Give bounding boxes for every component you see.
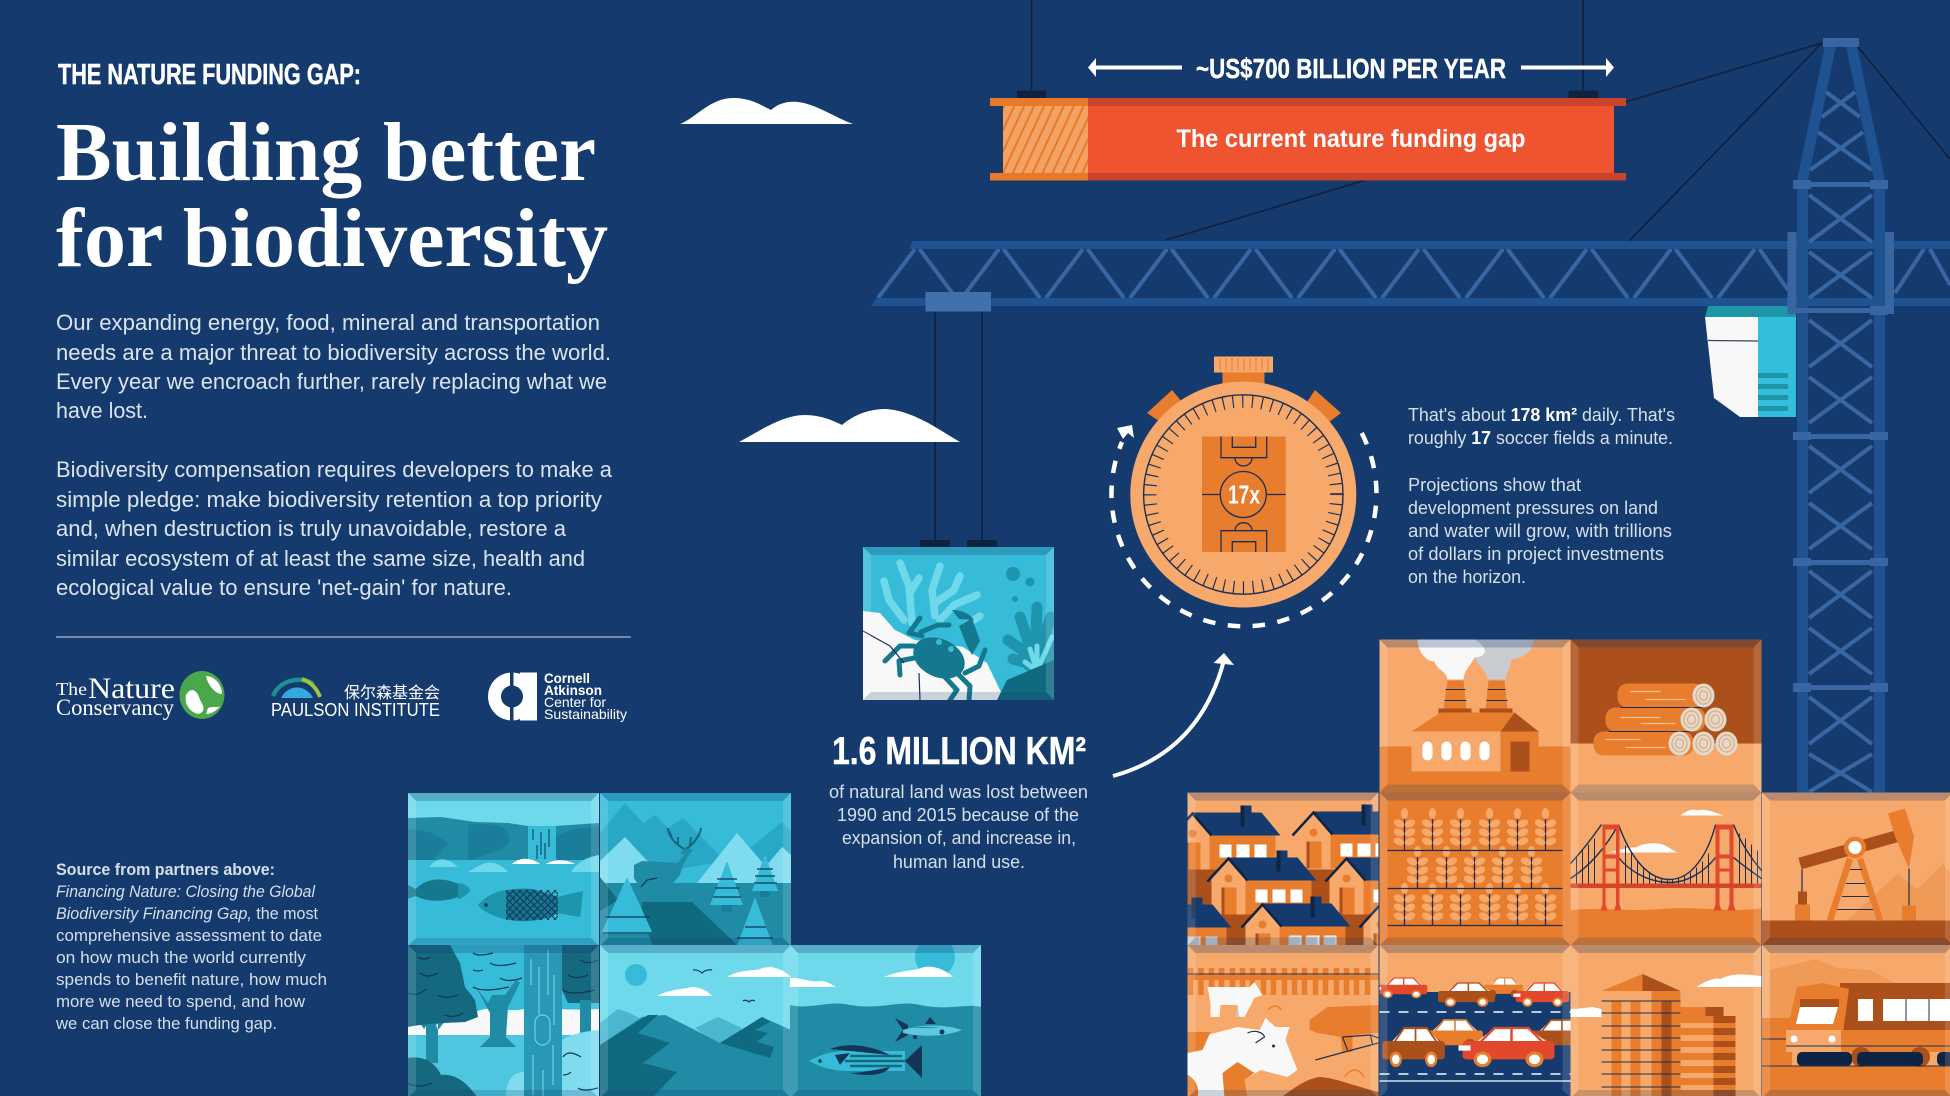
tile: cattle bbox=[1188, 945, 1378, 1096]
logo: Cornell Atkinson: Center for bbox=[544, 694, 606, 710]
logo: Paulson Institute: PAULSON INSTITUTE bbox=[271, 700, 440, 720]
crane trolley bbox=[926, 292, 991, 312]
tile: lake with fish bbox=[404, 793, 599, 946]
land-loss rate text bbox=[1408, 404, 1675, 587]
logo: The Nature Conservancy: Nature bbox=[88, 672, 175, 705]
crab bbox=[863, 610, 985, 700]
source note: Biodiversity Financing Gap, the most bbox=[56, 905, 318, 923]
curved arrow bbox=[1113, 653, 1234, 776]
compensation paragraph: similar ecosystem of at least the same size, health and bbox=[56, 546, 585, 571]
funding gap beam bbox=[990, 90, 1626, 180]
deer bbox=[634, 828, 702, 888]
stopwatch crown bbox=[1214, 356, 1273, 386]
tile: mountains and birds bbox=[600, 945, 791, 1096]
compensation paragraph bbox=[56, 457, 612, 600]
tile: factory bbox=[1380, 640, 1570, 792]
stopwatch bbox=[1130, 356, 1356, 608]
logo: The Nature Conservancy bbox=[56, 671, 224, 720]
land-loss rate text: roughly 17 soccer fields a minute. bbox=[1408, 427, 1673, 448]
tile: deer and mountains bbox=[600, 793, 791, 946]
source note: comprehensive assessment to date bbox=[56, 927, 322, 945]
tile: suspension bridge bbox=[1570, 792, 1762, 946]
logo: Cornell Atkinson bbox=[488, 671, 627, 722]
land-loss rate text: That's about 178 km² daily. That's bbox=[1408, 404, 1675, 425]
intro paragraph: have lost. bbox=[56, 398, 148, 423]
intro paragraph: Every year we encroach further, rarely replacing what we bbox=[56, 369, 607, 394]
dashed rotation ring bbox=[1111, 425, 1376, 626]
intro paragraph: needs are a major threat to biodiversity across the world. bbox=[56, 340, 611, 365]
land-loss description: expansion of, and increase in, bbox=[842, 827, 1076, 848]
main title bbox=[56, 106, 608, 285]
compensation paragraph: and, when destruction is truly unavoidable, restore a bbox=[56, 516, 566, 541]
intro paragraph: Our expanding energy, food, mineral and transportation bbox=[56, 310, 600, 335]
cloud 1 bbox=[680, 98, 853, 124]
funding gap beam: The current nature funding gap bbox=[1176, 125, 1526, 153]
funding gap label with arrows: ~US$700 BILLION PER YEAR bbox=[1196, 53, 1506, 84]
compensation paragraph: ecological value to ensure 'net-gain' for nature. bbox=[56, 575, 512, 600]
compensation paragraph: Biodiversity compensation requires developers to make a bbox=[56, 457, 612, 482]
tile: wheat field bbox=[1380, 792, 1570, 946]
main title: Building better bbox=[56, 106, 596, 199]
land-loss rate text: and water will grow, with trillions bbox=[1408, 520, 1672, 541]
tile: high-rise buildings bbox=[1570, 945, 1762, 1096]
tile: forest bbox=[408, 945, 599, 1096]
logo: The Nature Conservancy: Conservancy bbox=[56, 695, 174, 720]
compensation paragraph: simple pledge: make biodiversity retention a top priority bbox=[56, 487, 603, 512]
soccer field: 17x bbox=[1228, 480, 1260, 510]
tile: train bbox=[1762, 945, 1950, 1096]
logo: Cornell Atkinson: Atkinson bbox=[544, 683, 602, 698]
source note: spends to benefit nature, how much bbox=[56, 971, 327, 989]
tile: housing bbox=[1188, 792, 1378, 945]
land-loss description: 1990 and 2015 because of the bbox=[837, 804, 1079, 825]
logo: Cornell Atkinson: Sustainability bbox=[544, 706, 627, 722]
land-loss rate text: development pressures on land bbox=[1408, 497, 1658, 518]
source note: Source from partners above: bbox=[56, 861, 275, 879]
intro paragraph bbox=[56, 310, 611, 423]
land-loss rate text: of dollars in project investments bbox=[1408, 543, 1664, 564]
land-loss description: of natural land was lost between bbox=[829, 781, 1088, 802]
crane cab bbox=[1705, 306, 1796, 417]
logo: Paulson Institute: 保尔森基金会 bbox=[344, 684, 440, 702]
source note: Financing Nature: Closing the Global bbox=[56, 883, 316, 901]
logo: The Nature Conservancy: The bbox=[56, 679, 87, 699]
land-loss description: human land use. bbox=[893, 851, 1025, 872]
tile: river fish bbox=[790, 937, 981, 1096]
kicker heading: THE NATURE FUNDING GAP: bbox=[58, 59, 361, 91]
hanging tile: crab bbox=[863, 540, 1059, 700]
source note bbox=[55, 861, 327, 1033]
crane cables bbox=[935, 0, 1950, 540]
source note: more we need to spend, and how bbox=[56, 993, 305, 1011]
logo: Cornell Atkinson: Cornell bbox=[544, 671, 590, 686]
tile: timber logs bbox=[1570, 640, 1762, 792]
main title: for biodiversity bbox=[56, 192, 608, 285]
tile: oil pump bbox=[1762, 792, 1950, 946]
land-loss rate text: Projections show that bbox=[1408, 474, 1581, 495]
headline number: 1.6 MILLION KM² bbox=[832, 730, 1086, 773]
land-loss description bbox=[829, 781, 1088, 872]
land-loss rate text: on the horizon. bbox=[1408, 566, 1526, 587]
soccer field bbox=[1202, 436, 1286, 552]
source note: on how much the world currently bbox=[56, 949, 307, 967]
crane jib bbox=[871, 241, 1950, 306]
cloud 2 bbox=[739, 409, 960, 442]
source note: we can close the funding gap. bbox=[55, 1015, 277, 1033]
tile: traffic bbox=[1380, 945, 1570, 1096]
crane tower bbox=[1788, 38, 1894, 793]
logo: Paulson Institute bbox=[271, 679, 440, 720]
